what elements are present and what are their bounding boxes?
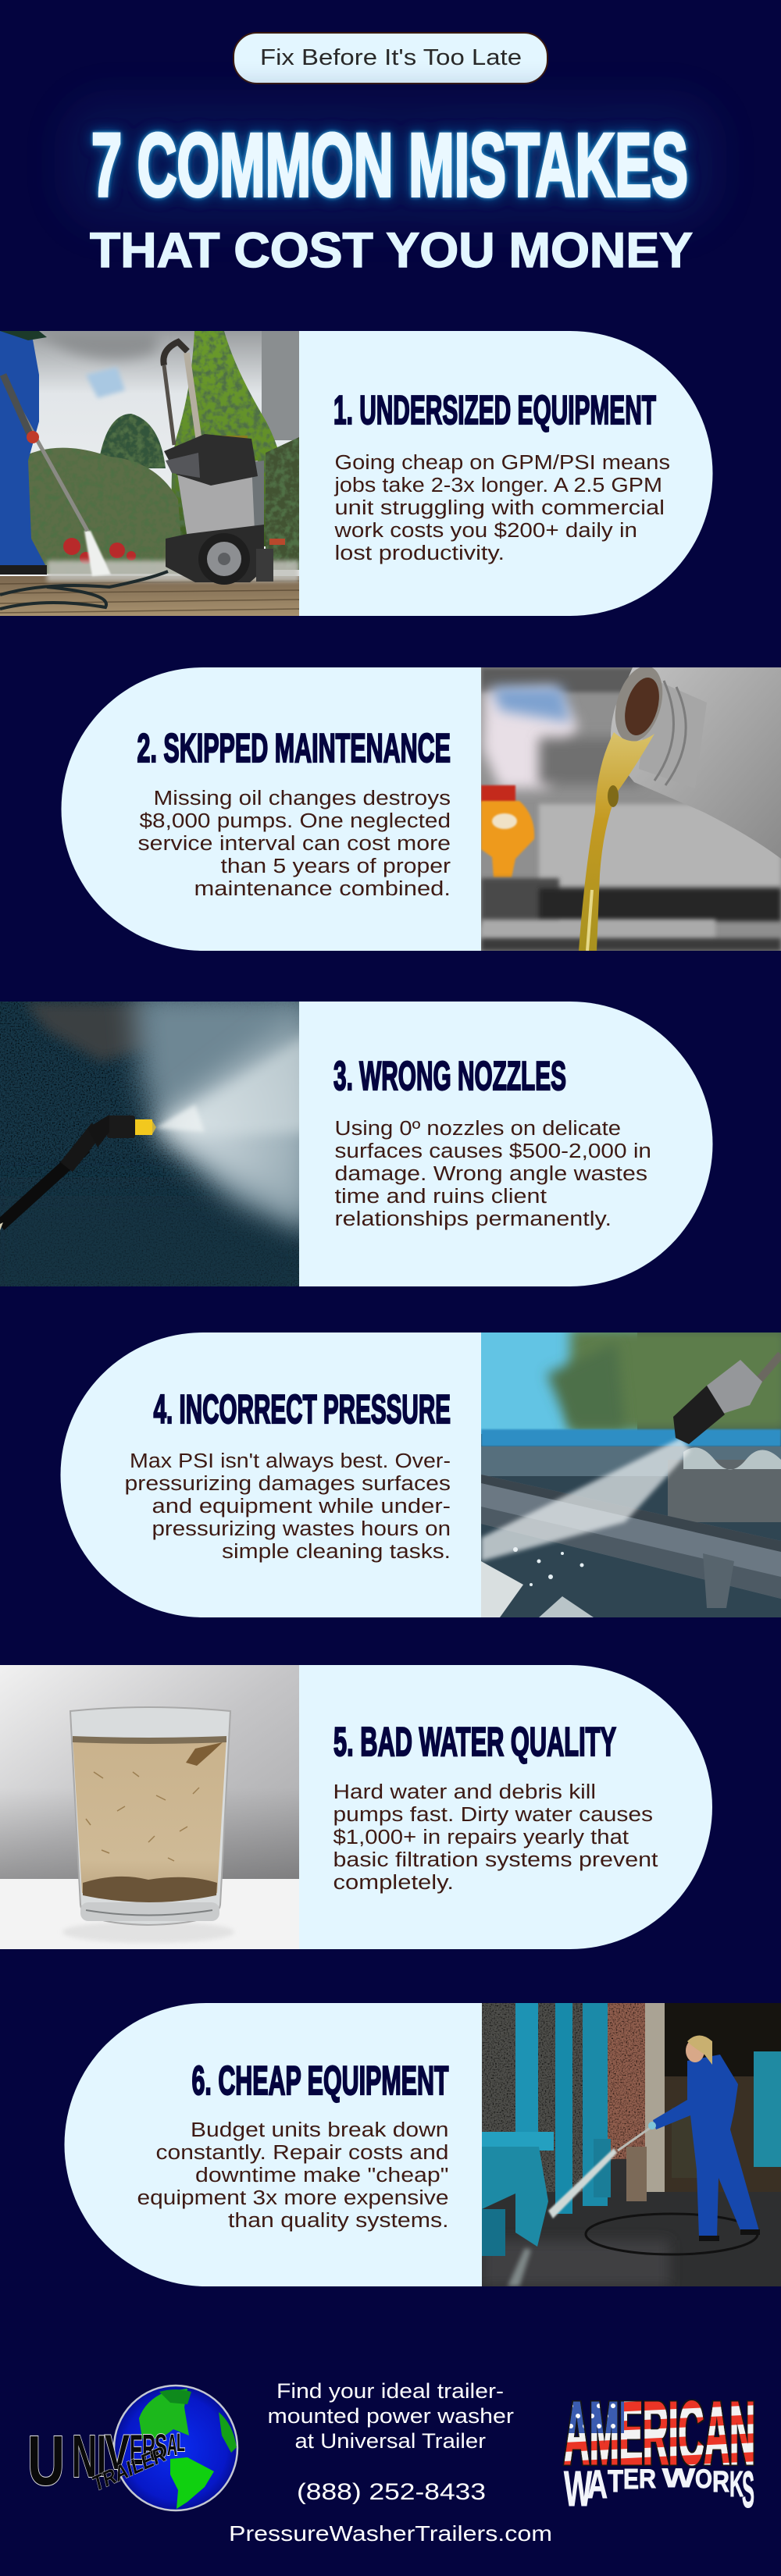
body text: than quality systems. (228, 2210, 448, 2232)
body text: lost productivity. (334, 543, 505, 564)
body text: Max PSI isn't always best. Over- (130, 1450, 451, 1472)
body text: constantly. Repair costs and (156, 2142, 448, 2164)
body text: pressurizing wastes hours on (152, 1518, 451, 1540)
body text: time and ruins client (334, 1186, 547, 1208)
body text: and equipment while under- (152, 1496, 451, 1517)
body text: unit struggling with commercial (334, 497, 665, 519)
body text (137, 788, 451, 900)
panel: 6 cheap equipment (65, 2003, 781, 2286)
body text: pressurizing damages surfaces (125, 1473, 451, 1495)
photo: washing a gutter (481, 1332, 781, 1617)
body text: Using 0º nozzles on delicate (334, 1118, 621, 1140)
body text: than 5 years of proper (220, 856, 451, 877)
text: S (742, 2460, 754, 2518)
panel: 1 undersized equipment (0, 331, 712, 616)
footer call to action: at Universal Trailer (295, 2429, 486, 2453)
photo: oil pouring into engine (481, 667, 781, 951)
heading: 4. INCORRECT PRESSURE (153, 1387, 451, 1432)
footer call to action: Find your ideal trailer- (276, 2379, 504, 2403)
UNIVERSAL wordmark: N (72, 2423, 97, 2490)
photo: pressure washer on patio (0, 331, 299, 616)
UNIVERSAL wordmark: L (177, 2428, 185, 2457)
body text: jobs take 2-3x longer. A 2.5 GPM (333, 475, 662, 496)
body text: completely. (333, 1872, 454, 1894)
logo: American Water Works: A (587, 2462, 608, 2507)
photo: worker washing a machine (482, 2003, 781, 2286)
UNIVERSAL wordmark: E (130, 2425, 143, 2474)
body text (125, 1450, 451, 1563)
phone number: (888) 252-8433 (297, 2479, 486, 2505)
heading: 2. SKIPPED MAINTENANCE (137, 726, 451, 771)
body text: Budget units break down (191, 2119, 448, 2141)
logo: American Water Works: K (729, 2464, 744, 2504)
logo: American Water Works: R (639, 2464, 656, 2494)
website: PressureWasherTrailers.com (229, 2521, 552, 2546)
body text: $8,000 pumps. One neglected (139, 810, 451, 832)
photo: glass of dirty water (0, 1665, 299, 1949)
logo: American Water Works: T (608, 2464, 623, 2499)
heading: 3. WRONG NOZZLES (333, 1054, 566, 1099)
panel: 4 incorrect pressure (61, 1327, 781, 1617)
logo: American Water Works: W (662, 2464, 696, 2493)
body text (137, 2119, 448, 2232)
footer call to action: mounted power washer (267, 2404, 514, 2428)
body text: Hard water and debris kill (333, 1781, 596, 1803)
body text: service interval can cost more (137, 833, 451, 855)
body text: downtime make "cheap" (195, 2165, 448, 2186)
title (55, 90, 726, 278)
logo: Universal Trailer (27, 2386, 237, 2510)
body text: Missing oil changes destroys (153, 788, 451, 809)
body text: $1,000+ in repairs yearly that (333, 1827, 629, 1848)
body text: damage. Wrong angle wastes (334, 1163, 647, 1185)
UNIVERSAL wordmark: I (97, 2423, 106, 2489)
logo: American Water Works: W (564, 2460, 592, 2517)
UNIVERSAL wordmark: R (142, 2428, 155, 2469)
body text: simple cleaning tasks. (222, 1541, 451, 1563)
body text (333, 1781, 658, 1894)
body text: work costs you $200+ daily in (333, 520, 637, 542)
header badge: Fix Before It's Too Late (260, 45, 522, 70)
UNIVERSAL wordmark: V (105, 2425, 130, 2480)
panel: 3 wrong nozzles (0, 991, 712, 1304)
body text: Going cheap on GPM/PSI means (334, 452, 670, 474)
body text: basic filtration systems prevent (333, 1849, 658, 1871)
heading: 6. CHEAP EQUIPMENT (192, 2058, 449, 2104)
icon: globe (114, 2386, 237, 2510)
body text: maintenance combined. (194, 878, 451, 900)
body text (334, 1118, 651, 1230)
UNIVERSAL wordmark: A (167, 2429, 177, 2462)
logo: American Water Works: O (695, 2464, 712, 2494)
body text: equipment 3x more expensive (137, 2187, 448, 2209)
body text: surfaces causes $500-2,000 in (334, 1140, 651, 1162)
UNIVERSAL wordmark: U (27, 2422, 65, 2500)
header badge (234, 33, 547, 84)
logo: American Water Works (564, 2384, 755, 2518)
body text: pumps fast. Dirty water causes (333, 1804, 653, 1826)
title: THAT COST YOU MONEY (90, 223, 693, 278)
logo: American Water Works: E (623, 2463, 639, 2495)
footer call to action (229, 2379, 552, 2546)
photo: nozzle spraying mist (0, 1002, 299, 1286)
TRAILER wordmark: TRAILER (91, 2441, 168, 2496)
body text (333, 452, 670, 564)
panel: 2 skipped maintenance (62, 660, 781, 951)
panel: 5 bad water quality (0, 1665, 712, 1949)
logo: American Water Works: R (712, 2466, 729, 2499)
body text: relationships permanently. (334, 1208, 612, 1230)
UNIVERSAL wordmark: S (155, 2428, 167, 2465)
